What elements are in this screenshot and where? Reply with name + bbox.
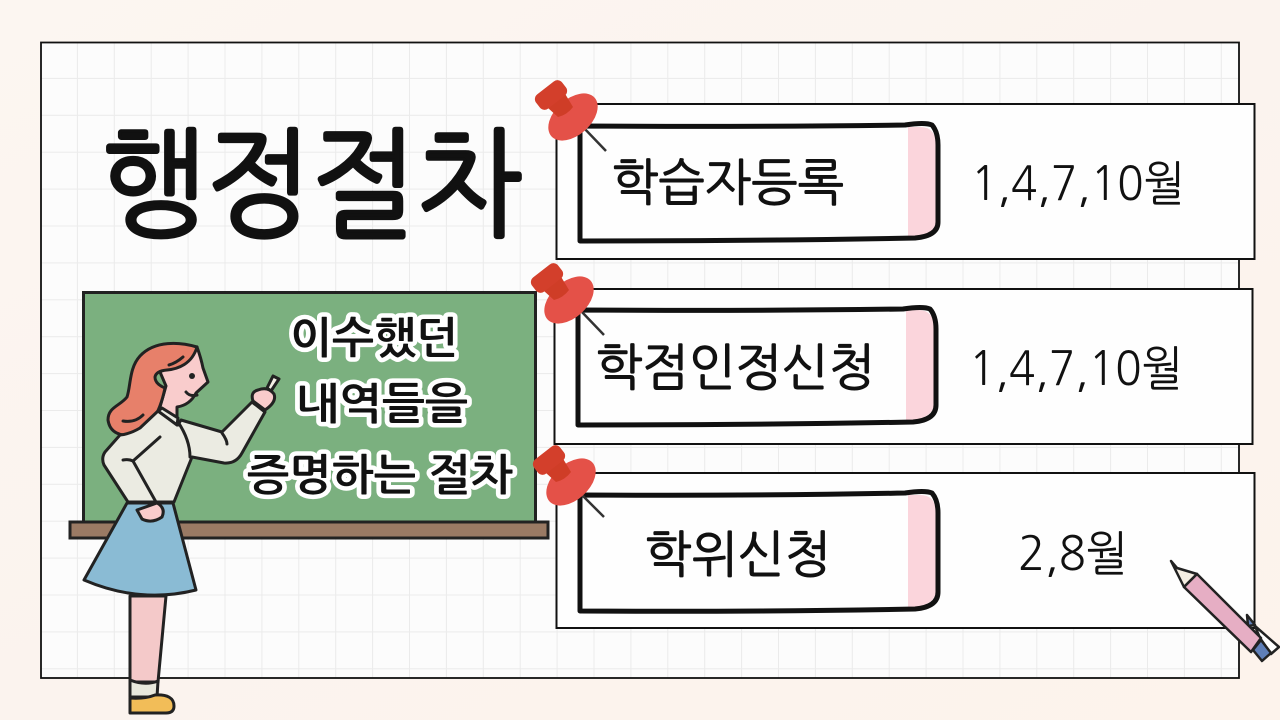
- icon: push pin: [530, 443, 605, 517]
- hair strands: [123, 357, 183, 421]
- title: 행정절차: [101, 125, 522, 243]
- card: 학위신청: [530, 443, 1254, 628]
- card panel: [554, 289, 1252, 444]
- leg: [130, 596, 166, 682]
- chalkboard text: 내역들을: [296, 382, 468, 426]
- card: 학습자등록: [532, 78, 1254, 259]
- pink label box: [906, 310, 934, 421]
- card panel: [556, 473, 1254, 628]
- months: 1,4,7,10월: [971, 160, 1185, 207]
- months: 1,4,7,10월: [969, 345, 1183, 392]
- chalkboard text: 증명하는 절차: [247, 453, 514, 497]
- icon: push pin: [528, 261, 604, 335]
- hand on hip: [137, 503, 163, 521]
- shoe: [130, 695, 174, 713]
- sock: [130, 680, 158, 697]
- chalkboard text: 이수했던: [290, 316, 458, 360]
- months: 2,8월: [1018, 530, 1128, 577]
- card panel: [556, 104, 1254, 259]
- torso and arm: [103, 402, 265, 502]
- card: 학점인정신청: [528, 261, 1252, 444]
- label text: 학습자등록: [612, 158, 844, 208]
- eye: [189, 373, 195, 379]
- chalk tray: [70, 522, 548, 538]
- chalk: [267, 376, 279, 391]
- illustration: teacher: [84, 343, 279, 713]
- raised hand: [252, 389, 275, 410]
- label text: 학위신청: [645, 530, 831, 580]
- pink label box: [908, 127, 936, 238]
- icon: pencil: [1171, 561, 1279, 661]
- panel: chalkboard: [70, 292, 548, 538]
- skirt: [84, 503, 196, 595]
- chalkboard text: [247, 316, 514, 497]
- pink label box: [908, 495, 936, 608]
- label text: 학점인정신청: [596, 343, 875, 393]
- neck and face: [160, 347, 208, 420]
- smile: [186, 392, 197, 396]
- collar: [158, 408, 178, 425]
- arm lines: [123, 422, 227, 502]
- icon: push pin: [532, 78, 607, 151]
- hair: [108, 343, 197, 435]
